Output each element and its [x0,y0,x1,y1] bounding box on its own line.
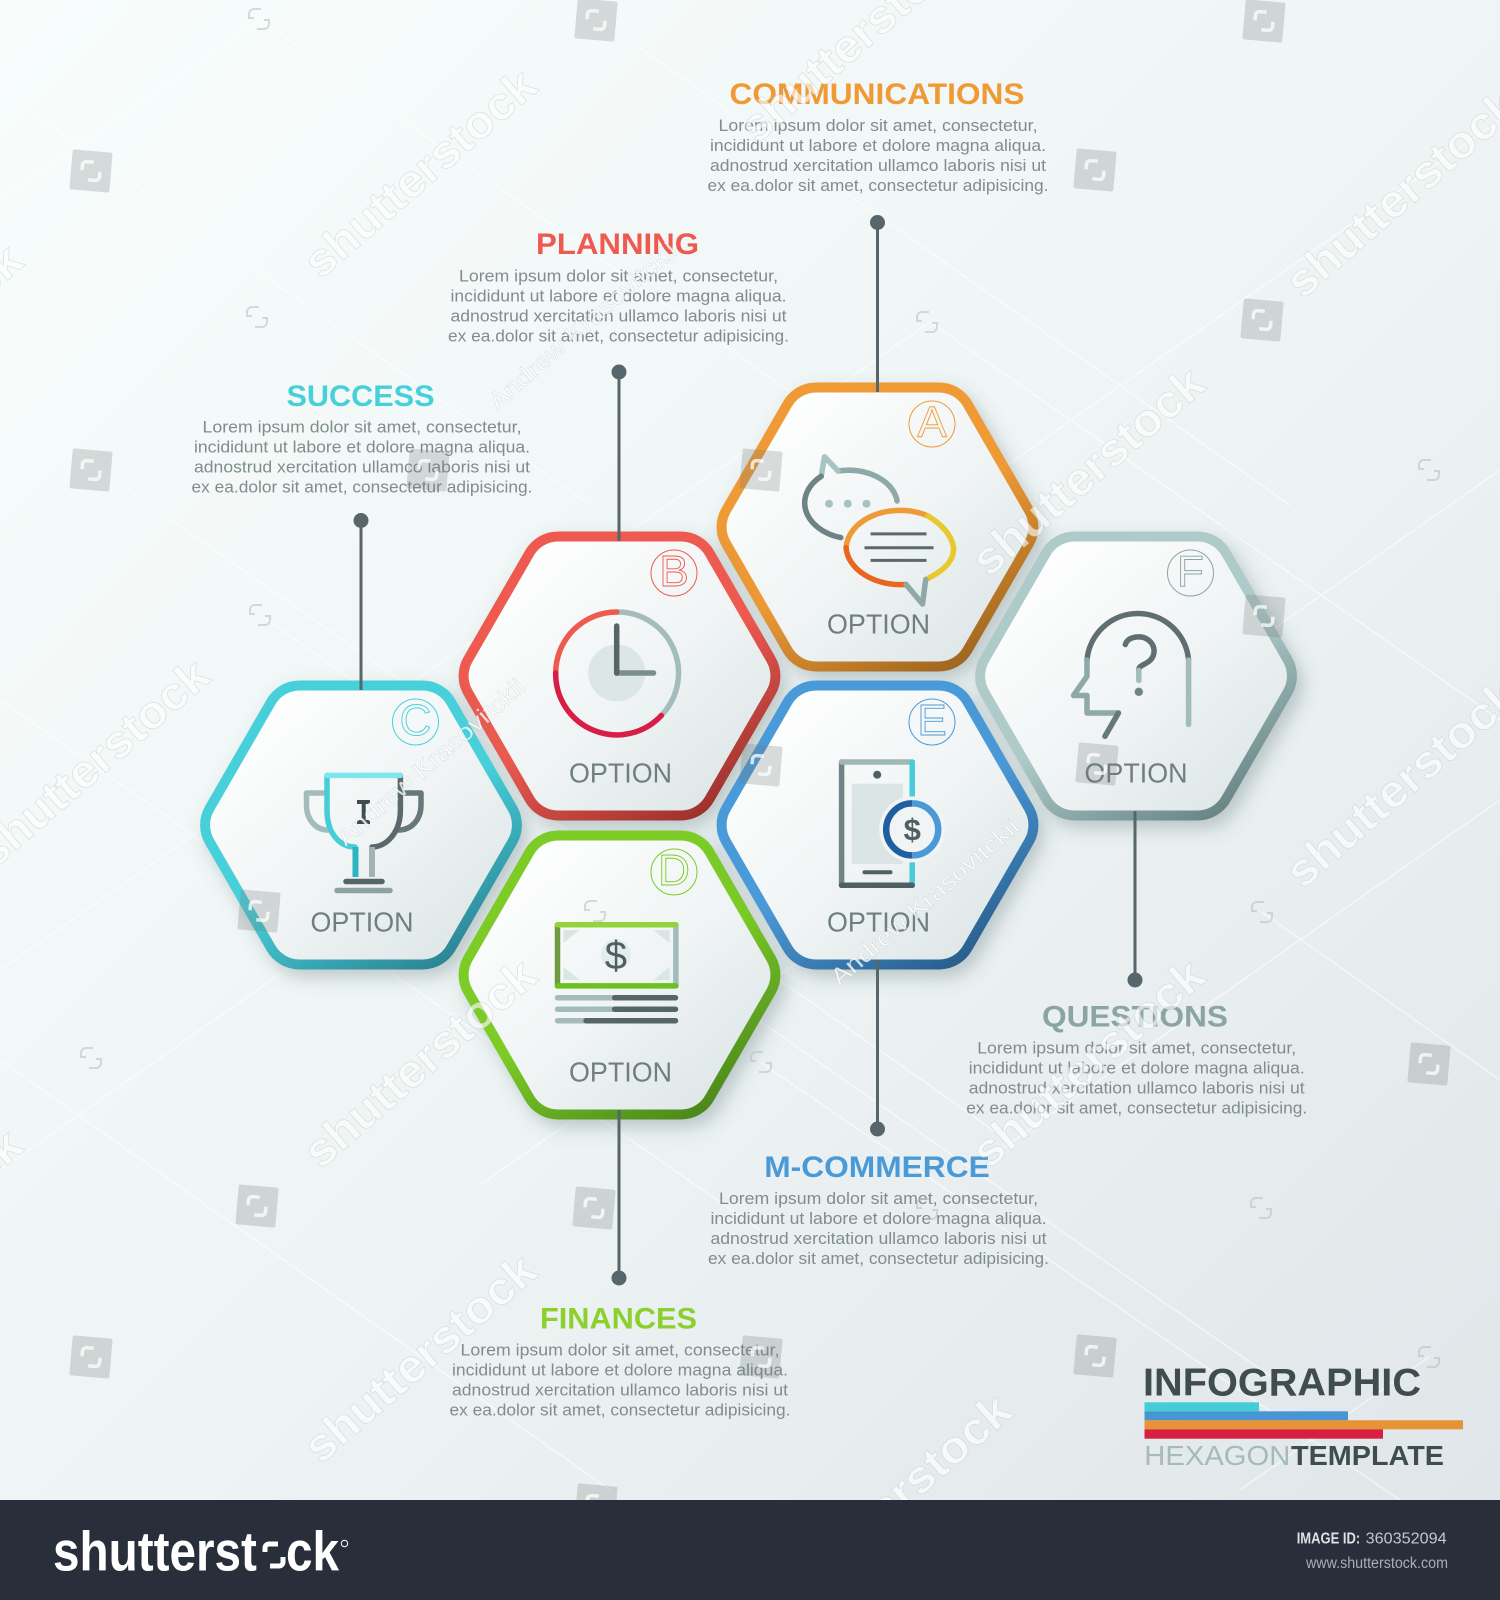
text block: success [192,380,532,496]
text block: planning [448,228,789,346]
logo colour bars [1144,1402,1463,1439]
hexagon C: success [205,686,517,964]
paragraph: success [192,418,532,496]
paragraph: m-commerce [708,1190,1049,1268]
paragraph: communications: ex ea.dolor sit amet, consectetur adipisicing. [708,177,1048,195]
logo subheading [1144,1440,1444,1471]
letter badge E [909,696,955,745]
hexagon A: communications [722,388,1033,666]
watermark overlay: Andrew Krasovitckii [826,813,1025,991]
icon: banknote: $ [605,934,627,978]
icon: phone with coin [842,762,945,885]
paragraph: planning: adnostrud xercitation ullamco laboris nisi ut [450,308,787,326]
hexagon D: finances [464,836,775,1114]
letter badge A: A [917,398,947,447]
option label E: OPTION [827,906,930,938]
watermark overlay: Andrew Krasovitckii [332,673,531,851]
icon: speech bubbles [805,457,954,604]
paragraph: communications: Lorem ipsum dolor sit amet, consectetur, [718,117,1038,135]
logo heading: INFOGRAPHIC [1143,1362,1421,1405]
paragraph: finances [450,1342,790,1420]
paragraph: finances: adnostrud xercitation ullamco laboris nisi ut [452,1382,788,1400]
icon: trophy [306,775,421,890]
heading: success: SUCCESS [286,380,434,413]
paragraph: communications: incididunt ut labore et dolore magna aliqua. [710,137,1046,155]
paragraph: communications: adnostrud xercitation ullamco laboris nisi ut [710,157,1046,175]
paragraph: m-commerce: adnostrud xercitation ullamco laboris nisi ut [710,1230,1047,1248]
footer bar [0,1500,1500,1600]
paragraph: questions: incididunt ut labore et dolore magna aliqua. [969,1060,1305,1078]
text block: finances [450,1302,790,1420]
option label C: OPTION [310,906,414,938]
footer image id: 360352094 [1366,1530,1447,1547]
paragraph: m-commerce: incididunt ut labore et dolore magna aliqua. [710,1210,1046,1228]
heading: m-commerce: M-COMMERCE [764,1151,990,1184]
paragraph: questions: ex ea.dolor sit amet, consectetur adipisicing. [966,1100,1307,1118]
hexagon F: questions [980,536,1292,816]
logo block: infographic hexagon template [1143,1362,1463,1471]
letter badge D: D [658,846,690,895]
logo subheading: HEXAGON [1144,1440,1290,1471]
icon: head with question mark [1074,614,1189,736]
hexagon E: m-commerce [722,686,1033,964]
watermark overlay: shutterstock [961,948,1214,1178]
paragraph: m-commerce: ex ea.dolor sit amet, consectetur adipisicing. [708,1250,1049,1268]
paragraph: questions [966,1040,1307,1118]
letter badge A [909,398,955,447]
heading: questions: QUESTIONS [1042,1000,1228,1034]
paragraph: success: adnostrud xercitation ullamco laboris nisi ut [194,458,530,476]
watermark overlay: Andrew Krasovitckii [484,237,683,415]
watermark overlay: shutterstock [293,948,546,1178]
watermark overlay: shutterstock [293,58,546,288]
footer image id [1297,1530,1447,1547]
paragraph: m-commerce: Lorem ipsum dolor sit amet, consectetur, [719,1190,1038,1208]
heading: communications: COMMUNICATIONS [730,78,1024,111]
icon: banknote [558,925,676,1021]
paragraph: planning: Lorem ipsum dolor sit amet, consectetur, [459,268,778,286]
paragraph: finances: Lorem ipsum dolor sit amet, consectetur, [460,1342,780,1360]
paragraph: questions: adnostrud xercitation ullamco laboris nisi ut [969,1080,1305,1098]
paragraph: success: ex ea.dolor sit amet, consectetur adipisicing. [192,478,532,496]
icon: clock [556,612,679,735]
letter badge C: C [400,696,431,745]
letter badge F [1168,547,1214,596]
option label B: OPTION [569,758,672,788]
text block: communications [708,78,1048,195]
footer image id: IMAGE ID: [1297,1530,1360,1547]
watermark overlay: shutterstock [961,356,1214,586]
hexagon B: planning [464,536,775,816]
paragraph: communications [708,117,1048,195]
footer url: www.shutterstock.com [1305,1555,1448,1572]
letter badge F: F [1177,547,1204,596]
paragraph: planning [448,268,789,346]
option label D: OPTION [569,1056,672,1088]
text block: m-commerce [708,1151,1049,1268]
logo subheading: TEMPLATE [1291,1440,1444,1471]
paragraph: finances: ex ea.dolor sit amet, consectetur adipisicing. [450,1402,790,1420]
heading: planning: PLANNING [536,228,699,261]
heading: finances: FINANCES [540,1302,697,1336]
paragraph: success: incididunt ut labore et dolore magna aliqua. [194,438,530,456]
letter badge C [392,696,438,745]
connector dots [354,215,1142,1286]
letter badge B: B [659,547,689,596]
paragraph: questions: Lorem ipsum dolor sit amet, consectetur, [977,1040,1296,1058]
paragraph: finances: incididunt ut labore et dolore magna aliqua. [452,1362,788,1380]
letter badge E: E [917,696,947,745]
watermark overlay: shutterstock [293,1243,546,1473]
icon: phone with coin: $ [904,812,921,847]
paragraph: planning: incididunt ut labore et dolore magna aliqua. [450,288,786,306]
letter badge B [651,547,697,596]
footer logo: shutterstock [53,1520,340,1583]
letter badge D [651,846,697,895]
connector lines [361,222,1135,1278]
paragraph: planning: ex ea.dolor sit amet, consectetur adipisicing. [448,328,789,346]
option label F: OPTION [1084,758,1188,788]
text block: questions [966,1000,1307,1118]
option label A: OPTION [827,608,930,640]
paragraph: success: Lorem ipsum dolor sit amet, consectetur, [202,418,522,436]
